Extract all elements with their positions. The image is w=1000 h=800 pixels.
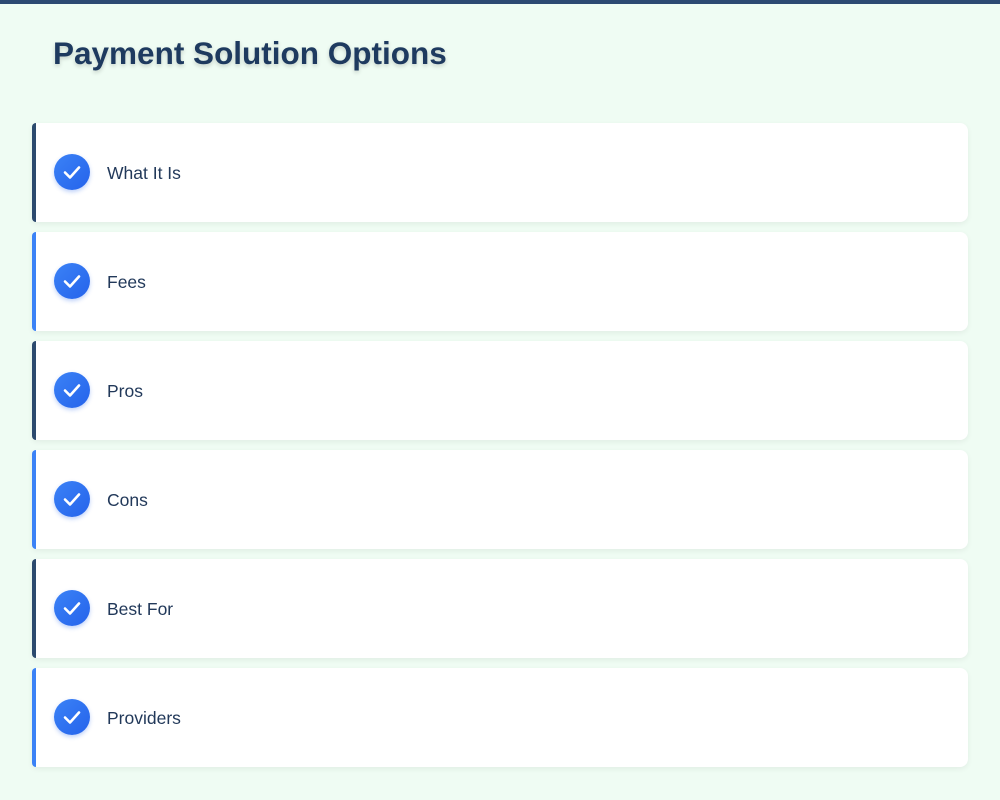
card: Providers: Providers xyxy=(107,708,181,728)
card: Pros xyxy=(32,341,968,440)
card: Fees: Fees xyxy=(107,272,146,292)
card: Best For xyxy=(32,559,968,658)
card: Providers xyxy=(32,668,968,767)
card: Pros: Pros xyxy=(107,381,143,401)
card: Cons: Cons xyxy=(107,490,148,510)
card: Fees xyxy=(32,232,968,331)
card: What It Is: What It Is xyxy=(107,163,181,183)
card: Cons xyxy=(32,450,968,549)
card: What It Is xyxy=(32,123,968,222)
title: Payment Solution Options xyxy=(53,35,447,71)
card: Best For: Best For xyxy=(107,599,173,619)
